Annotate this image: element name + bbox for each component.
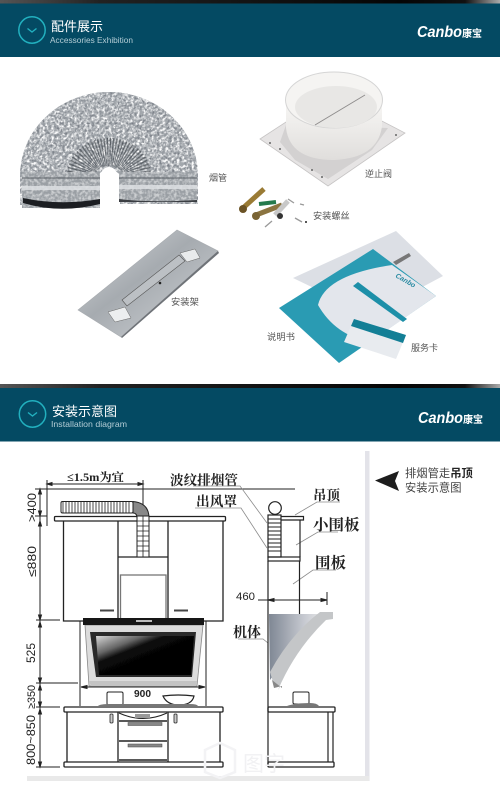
logo: Canbo: Canbo	[417, 24, 462, 41]
subheading: installation: Installation diagram	[51, 419, 127, 429]
label: small panel: 小围板	[313, 515, 360, 534]
label: panel: 围板	[315, 553, 347, 572]
hood side walls and width dimension	[80, 621, 206, 706]
label: duct: 烟管	[209, 172, 227, 183]
diagram: side elevation	[258, 502, 335, 767]
corrugated duct	[61, 502, 149, 557]
side duct and ceiling	[268, 502, 304, 557]
logo: Canbo: 康宝	[463, 413, 483, 426]
label: 1.5 m limit: ≤1.5m为宜	[67, 470, 125, 484]
hob and cookware	[98, 692, 198, 706]
back sheet	[293, 231, 443, 315]
heading: accessories: 配件展示	[51, 19, 103, 34]
dimension: left height chain	[35, 489, 78, 767]
diagram: front elevation	[35, 480, 295, 767]
decorative frame strips	[365, 451, 370, 781]
side hood	[269, 612, 333, 690]
dimension labels	[24, 470, 360, 765]
label: service card: 服务卡	[411, 342, 438, 353]
header: accessories exhibition	[0, 0, 500, 57]
ceiling line	[35, 488, 295, 490]
diagram: leader lines	[193, 486, 340, 643]
note: duct through ceiling	[375, 466, 474, 494]
label: ≥400: >400	[25, 493, 39, 522]
icon: arrow pointer	[375, 471, 399, 491]
label: manual: 说明书	[267, 331, 295, 342]
dimension: 460	[258, 592, 327, 605]
watermark	[205, 743, 285, 778]
service card	[344, 319, 406, 359]
upper cabinet	[54, 516, 226, 621]
label: 900: 900	[134, 688, 151, 700]
logo: Canbo: 康宝	[462, 27, 482, 40]
heading: installation: 安装示意图	[52, 404, 117, 419]
photo: flexible aluminium duct	[22, 98, 197, 209]
label: corrugated duct: 波纹排烟管	[170, 472, 238, 488]
label: ceiling: 吊顶	[313, 487, 341, 503]
note text: 排烟管走吊顶	[405, 466, 474, 480]
logo: Canbo: Canbo	[418, 410, 463, 427]
photo: mounting screws	[239, 189, 307, 227]
subheading: accessories: Accessories Exhibition	[50, 35, 133, 45]
icon: circled chevron	[19, 17, 45, 43]
dimension: width limit	[47, 480, 143, 526]
label: 800–850: 800~850	[24, 715, 38, 765]
photo: mounting bracket	[78, 230, 219, 338]
label: bracket: 安装架	[171, 296, 199, 307]
watermark: 图字	[243, 753, 285, 776]
label: check valve: 逆止阀	[365, 168, 392, 179]
label: outlet hood: 出风罩	[196, 493, 237, 509]
label: ≥350: ≥350	[26, 685, 38, 709]
side pot and counter	[268, 692, 335, 767]
label: body: 机体	[233, 624, 261, 641]
header: installation diagram	[0, 384, 500, 442]
photo: manual and documents	[279, 231, 443, 363]
label: 525: 525	[24, 643, 38, 663]
label: screws: 安装螺丝	[313, 210, 350, 221]
label: 460: 460	[236, 591, 255, 603]
label: ≤880: ≤880	[25, 546, 39, 577]
side panels	[268, 557, 300, 765]
manual cover	[279, 249, 436, 363]
icon: circled chevron	[19, 401, 46, 427]
base cabinet	[64, 707, 223, 767]
photo: manual and documents: Canbo	[394, 273, 417, 290]
note: duct through ceiling: 安装示意图	[405, 480, 462, 494]
photo: check valve	[260, 72, 405, 186]
range hood	[83, 618, 204, 686]
